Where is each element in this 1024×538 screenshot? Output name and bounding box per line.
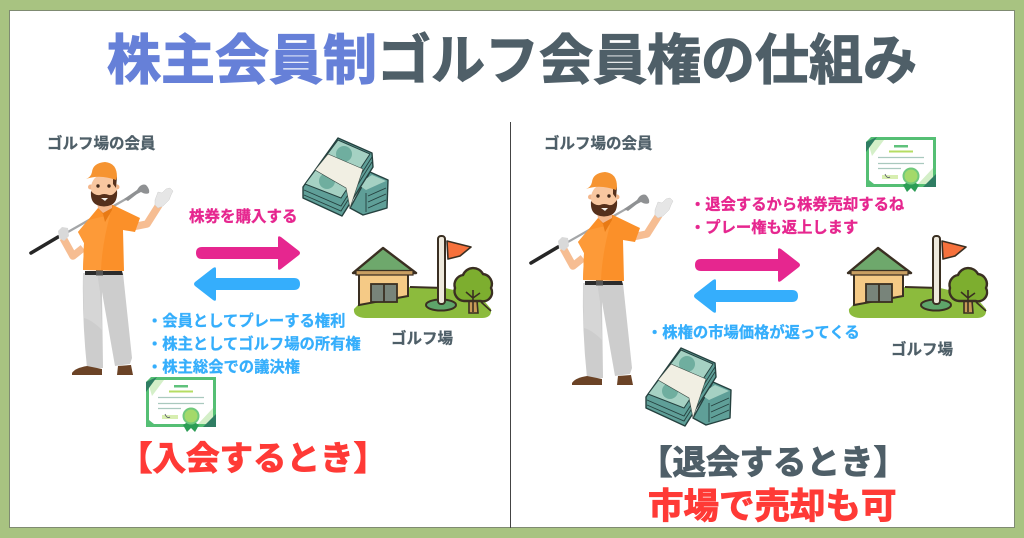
title: 株主会員制ゴルフ会員権の仕組み [107,31,917,91]
text block: sell shares: ・退会するから株券売却するね [690,196,905,214]
arrow: pink right [695,248,800,282]
text block: member rights: ・会員としてプレーする権利 [147,312,345,330]
icon: golfer [531,172,673,385]
icon: golfer [31,162,173,375]
label: golf club member: ゴルフ場の会員 [47,134,156,152]
icon: golf course [848,236,987,318]
divider [510,122,512,528]
panel: leaving [531,134,987,526]
icon: certificate [146,377,216,432]
icon: certificate [866,137,936,192]
arrow: blue left [694,279,798,313]
label: golf course: ゴルフ場 [891,340,954,358]
text block: member rights: ・株主総会での議決権 [147,358,300,376]
heading: when leaving: 【退会するとき】 [639,445,907,482]
heading: when joining: 【入会するとき】 [119,441,387,478]
icon: money stacks [646,348,731,426]
arrow: pink right [196,236,300,270]
text block: sell shares: ・プレー権も返上します [690,218,858,236]
label: golf course: ゴルフ場 [391,328,454,348]
panel: joining [31,134,492,478]
heading: can sell on market: 市場で売却も可 [648,486,897,526]
text block: market price: ・株権の市場価格が返ってくる [647,324,860,342]
label: golf club member: ゴルフ場の会員 [544,134,653,152]
text block: member rights [147,312,361,376]
icon: money stacks [303,138,388,216]
label: buy shares: 株券を購入する [189,208,298,226]
arrow: blue left [194,267,300,301]
text block: sell shares [690,196,905,236]
icon: golf course [353,236,492,318]
text block: member rights: ・株主としてゴルフ場の所有権 [147,335,361,353]
